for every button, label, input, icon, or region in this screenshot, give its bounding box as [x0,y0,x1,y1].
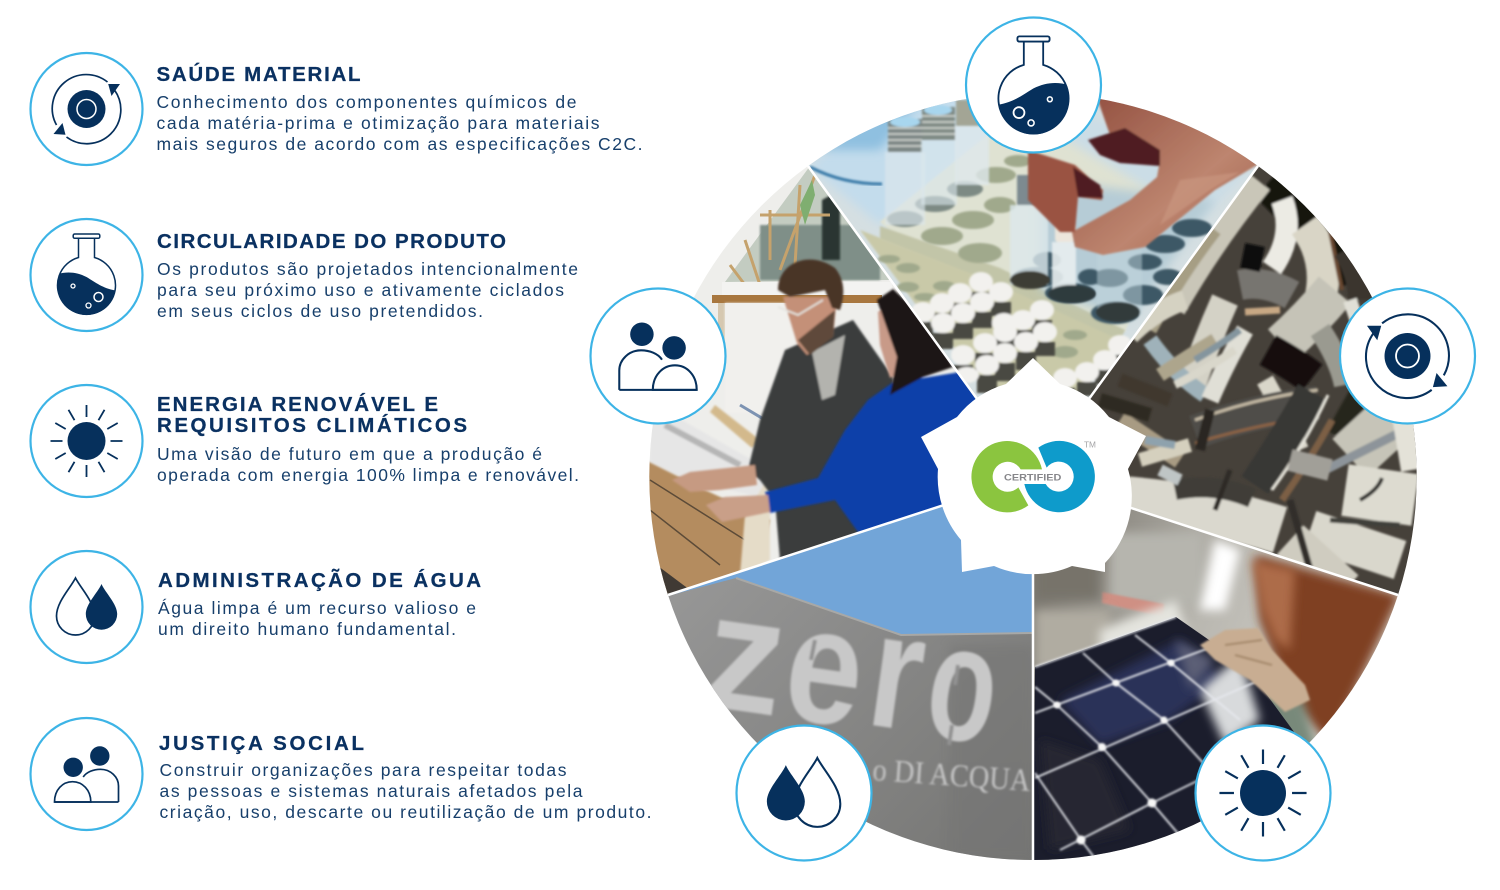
text: Água description [158,598,476,639]
text: Justiça description: Construir organizações para respeitar todas [160,760,567,780]
woman [706,288,976,532]
photo lettering: zero [711,619,994,746]
logo text: CERTIFIED [1004,472,1062,482]
list item: Administração de Água [30,551,481,663]
icon: material health cycle [30,53,142,165]
photo lettering: zero: z [693,557,798,751]
text: Saúde Material description: cada matéria-prima e otimização para materiais [156,113,600,133]
text: Água description: Água limpa é um recurso valioso e [158,598,476,618]
heading: Saúde Material: SAÚDE MATERIAL [156,62,360,86]
trademark: TM [1084,439,1096,449]
icon: people [30,718,142,830]
photo lettering: zero: r [859,576,936,766]
panel: left list of five criteria [30,53,652,830]
heading: Justiça Social: JUSTIÇA SOCIAL [159,732,364,755]
text: Energia description: Uma visão de futuro em que a produção é [157,444,542,464]
icon circle: sun on wheel [1196,726,1330,860]
text: Energia description: operada com energia 100% limpa e renovável. [157,465,579,485]
text: Energia description [157,444,579,485]
photo wedge: laboratory vials and hand [808,99,1258,398]
photo lettering: di acqua: o DI ACQUA [872,751,1032,798]
photo lettering: zero: e [775,569,876,762]
text: Circularidade description: para seu próximo uso e ativamente ciclados [157,280,564,300]
icon: sun [30,385,142,497]
photo wedge: two people at a material table [649,167,976,595]
small white-capped vials [911,272,1132,402]
list item: Energia Renovável [30,385,579,497]
star shape [921,358,1146,574]
heading: Circularidade do Produto: CIRCULARIDADE DO PRODUTO [157,230,506,253]
badge: white star with Cradle to Cradle Certified logo [921,358,1146,574]
heading: Energia Renovável e Requisitos Climáticos: ENERGIA RENOVÁVEL E [157,393,438,416]
text: Circularidade description: em seus ciclos de uso pretendidos. [157,301,483,321]
text: Água description: um direito humano fundamental. [158,619,456,639]
text: Justiça description [160,760,652,822]
hand [1028,92,1262,255]
icon circle: water drops on wheel [736,726,872,860]
photo wedge: textile ribbons [1080,160,1425,600]
text: Justiça description: as pessoas e sistemas naturais afetados pela [160,781,583,801]
text: Saúde Material description: Conhecimento dos componentes químicos de [156,92,576,112]
logo: C2C infinity mark [971,439,1096,512]
icon: water drops [30,551,142,663]
list item: Justiça Social [30,718,652,830]
list item: Circularidade do Produto [30,219,578,331]
photo wedge: solar panel and hand [1034,509,1398,860]
heading: Administração de Água: ADMINISTRAÇÃO DE ÁGUA [158,569,481,592]
text: Circularidade description [157,259,578,321]
icon circle: material cycle on wheel [1340,288,1475,424]
text: Circularidade description: Os produtos são projetados intencionalmente [157,259,578,279]
text: Saúde Material description [156,92,642,154]
vials large [885,100,1142,322]
list item: Saúde Material [30,53,642,165]
icon: flask [30,219,142,331]
icon circle: flask on wheel [966,18,1101,152]
heading: Energia Renovável e Requisitos Climáticos: REQUISITOS CLIMÁTICOS [157,414,467,437]
chart: circular photo wheel with five wedges [645,90,1425,865]
text: Justiça description: criação, uso, descarte ou reutilização de um produto. [160,802,652,822]
man [672,259,893,560]
photo wedge: grey building with zero sign [668,506,1032,860]
photo lettering: zero: o [917,587,1010,779]
text: Saúde Material description: mais seguros de acordo com as especificações C2C. [156,134,642,154]
heading: Energia Renovável e Requisitos Climáticos [157,393,467,437]
icon circle: people on wheel [590,288,726,424]
